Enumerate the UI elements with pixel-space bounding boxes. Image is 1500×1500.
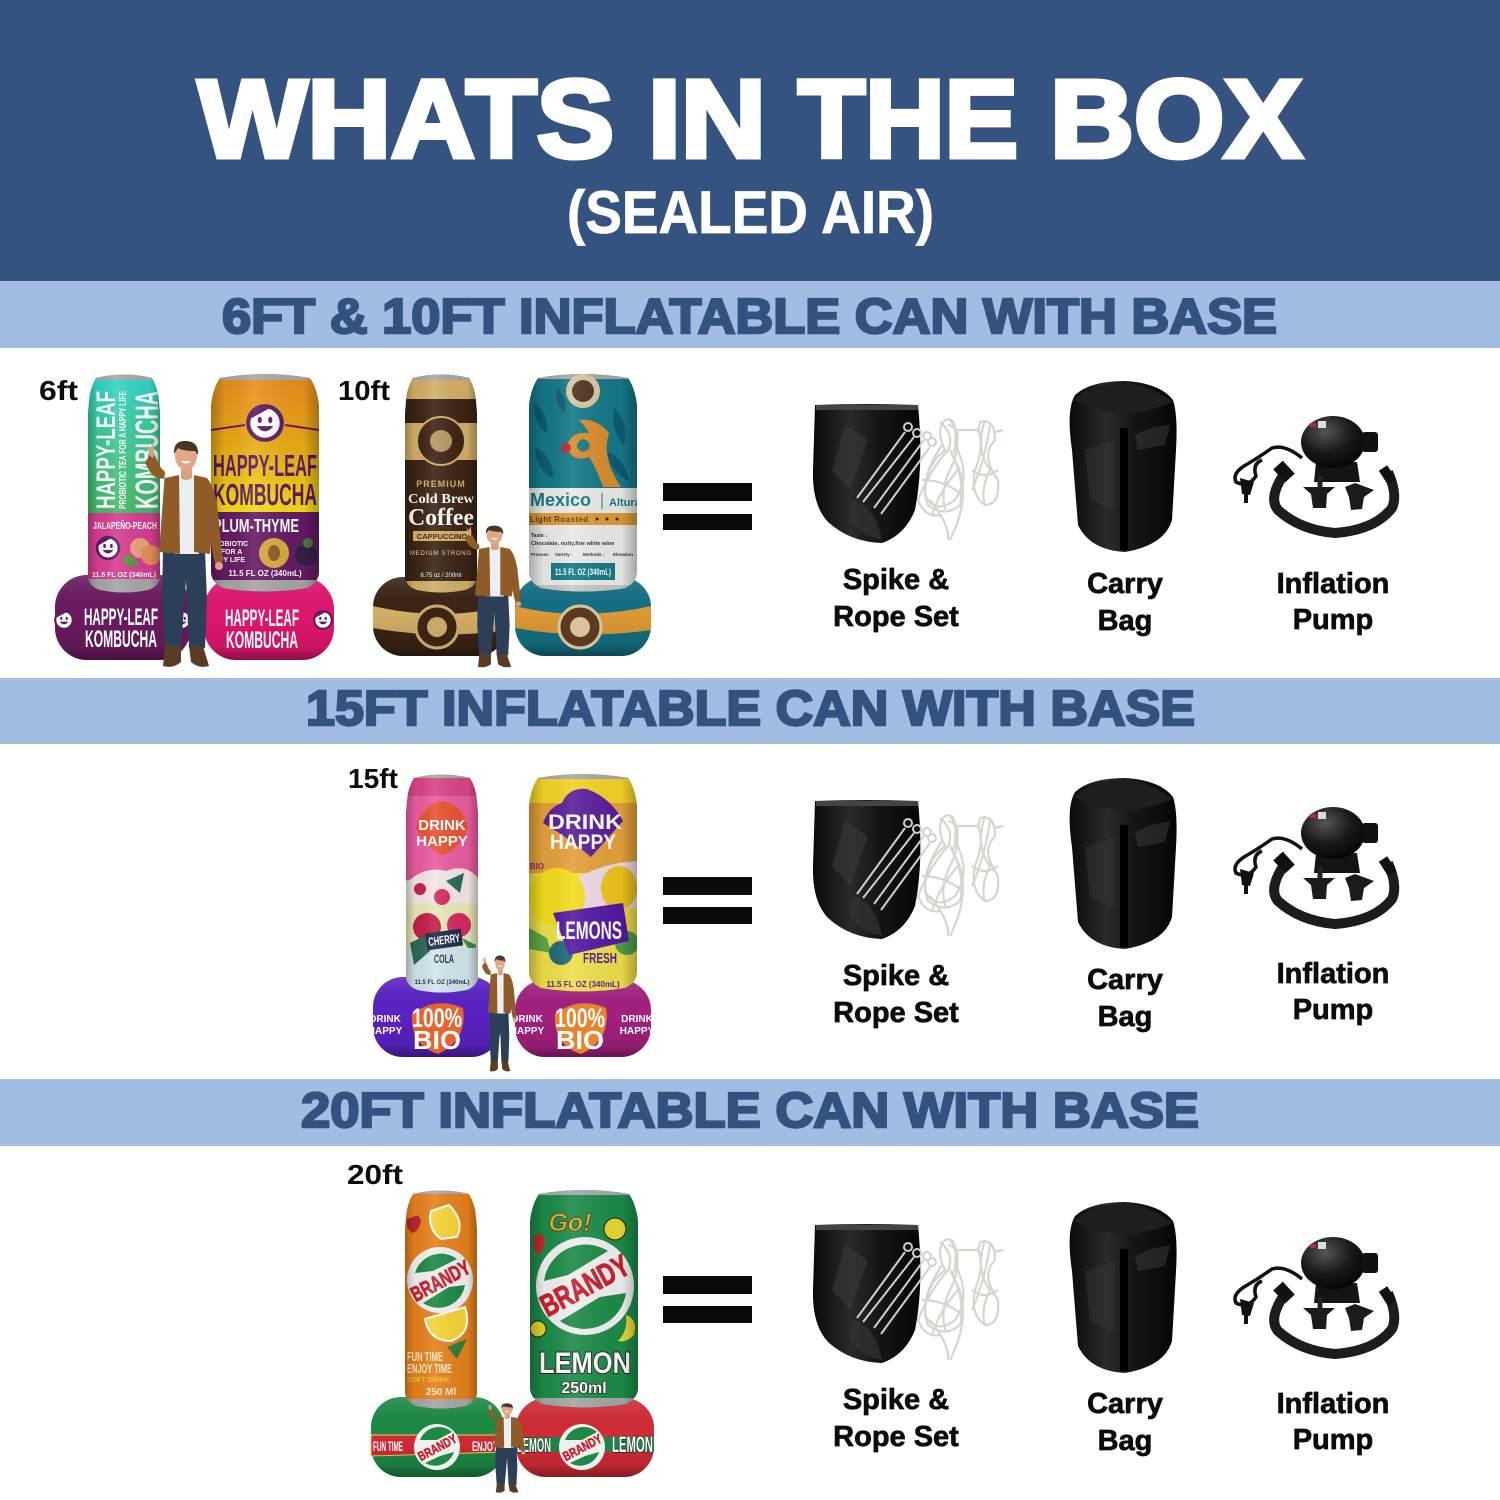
section band: 20ft — [0, 1079, 1500, 1146]
base: magenta drink happy: HAPPY — [510, 1026, 545, 1037]
base: green brandy: FUN TIME — [373, 1438, 403, 1454]
can: orange brandy: FUN TIME — [407, 1349, 443, 1364]
label: carry bag: Carry — [1087, 568, 1163, 600]
base: magenta drink happy — [510, 980, 655, 1057]
label: carry bag: Bag — [1098, 1425, 1152, 1457]
can: mexico altura coffee: Mexico — [530, 490, 591, 510]
can: plum thyme kombucha: 11.5 FL OZ (340mL) — [228, 569, 302, 578]
icon: carry bag — [1070, 778, 1177, 949]
can: lemons fresh: LEMONS — [556, 917, 622, 945]
base: magenta drink happy: DRINK — [511, 1014, 544, 1025]
can: mexico altura coffee: Chocolate, nutty,fine white wine — [531, 541, 614, 547]
can: mexico altura coffee: Light Roasted — [530, 515, 589, 524]
can: orange brandy: ENJOY TIME — [407, 1361, 452, 1376]
label: inflation pump: Inflation — [1277, 568, 1389, 600]
title: IN — [648, 58, 766, 181]
can: lemons fresh — [528, 770, 639, 996]
band heading: 15ft: 15FT INFLATABLE CAN WITH BASE — [306, 682, 1195, 736]
can: mexico altura coffee: Variety : — [555, 552, 573, 557]
can: cherry cola: DRINK — [418, 817, 466, 834]
can: cherry cola: 11.5 FL OZ (340mL) — [415, 980, 469, 986]
can: green lemon brandy: 250ml — [561, 1380, 607, 1397]
icon: inflation pump — [1235, 1237, 1394, 1354]
can: cherry cola: HAPPY — [416, 833, 468, 850]
size label 10ft: 10ft — [338, 375, 390, 406]
can: cold brew coffee: MEDIUM STRONG — [410, 551, 472, 557]
base: purple kombucha: KOMBUCHA — [85, 626, 157, 653]
can: green lemon brandy: Go! — [548, 1209, 592, 1237]
title — [198, 58, 1302, 181]
title: BOX — [1050, 58, 1302, 181]
label: spike and rope set: Rope Set — [833, 1421, 959, 1453]
panel: included items first row — [813, 381, 1394, 637]
can: cherry cola: COLA — [434, 952, 454, 966]
base: magenta drink happy: BIO — [556, 1025, 604, 1055]
can: cold brew coffee: PREMIUM — [416, 479, 466, 489]
can: mexico altura coffee: Elevation — [613, 552, 633, 557]
person: 15ft scale — [482, 955, 516, 1071]
base: red brandy: BRANDY — [560, 1431, 605, 1464]
can: jalapeno peach kombucha: PROBIOTIC TEA FOR A HAPPY LIFE — [118, 391, 129, 509]
panel: 20ft cans — [347, 1159, 654, 1493]
label: inflation pump: Pump — [1293, 1424, 1373, 1456]
icon: spike and rope set — [813, 800, 1003, 939]
can: lemons fresh: BIO — [530, 862, 544, 871]
person: 10ft scale — [465, 526, 521, 667]
base: purple drink happy: DRINK — [369, 1014, 402, 1025]
base: pink kombucha: HAPPY-LEAF — [225, 605, 299, 632]
band heading: 6ft and 10ft: 6FT & 10FT INFLATABLE CAN WITH BASE — [222, 290, 1277, 344]
person: 20ft scale — [487, 1403, 525, 1493]
header background — [0, 0, 1500, 281]
can: cold brew coffee: CAPPUCCINO — [417, 532, 467, 541]
size label 6ft: 6ft — [39, 375, 78, 406]
base: purple drink happy: 100% — [412, 1003, 462, 1033]
title: WHATS — [198, 58, 614, 181]
icon: carry bag — [1070, 381, 1177, 552]
can: jalapeno peach kombucha: HAPPY-LEAF — [91, 391, 121, 509]
can: mexico altura coffee — [528, 370, 642, 596]
base: magenta drink happy: HAPPY — [620, 1026, 655, 1037]
can: lemons fresh: 11.5 FL OZ (340mL) — [546, 980, 620, 989]
can: mexico altura coffee: Methods : — [583, 552, 605, 557]
label: inflation pump: Inflation — [1277, 1388, 1389, 1420]
can: green lemon brandy — [529, 1186, 639, 1413]
can: orange brandy: BRANDY — [407, 1256, 474, 1307]
label: spike and rope set: Spike & — [843, 1384, 949, 1416]
person: 6ft scale — [145, 441, 223, 667]
label: inflation pump: Inflation — [1277, 958, 1389, 990]
can: plum thyme kombucha: KOMBUCHA — [213, 477, 317, 512]
label: spike and rope set: Spike & — [843, 960, 949, 992]
can: plum thyme kombucha: PLUM-THYME — [213, 516, 299, 536]
can: plum thyme kombucha: HAPPY-LEAF — [213, 448, 317, 483]
base: purple kombucha: HAPPY-LEAF — [84, 604, 158, 631]
can: plum thyme kombucha: PPY LIFE — [214, 557, 245, 564]
can: jalapeno peach kombucha — [88, 374, 160, 592]
base: magenta drink happy: DRINK — [621, 1014, 654, 1025]
label: spike and rope set: Rope Set — [833, 601, 959, 633]
subtitle: (SEALED AIR) — [567, 179, 934, 246]
base: pink kombucha — [204, 577, 334, 660]
base: red brandy: LEMON — [612, 1432, 653, 1457]
base: green brandy: BRANDY — [415, 1431, 460, 1464]
panel: 15ft cans — [348, 763, 655, 1071]
can: plum thyme kombucha — [210, 370, 320, 596]
label: inflation pump: Pump — [1293, 604, 1373, 636]
can: orange brandy — [404, 1186, 478, 1413]
base: red brandy — [516, 1398, 654, 1477]
label: carry bag: Carry — [1087, 1388, 1163, 1420]
icon: inflation pump — [1235, 807, 1394, 924]
base: purple drink happy — [368, 977, 501, 1057]
section band: 6ft and 10ft — [0, 281, 1500, 348]
can: cold brew coffee: Coffee — [408, 505, 474, 531]
can: cold brew coffee — [404, 370, 478, 596]
label: spike and rope set: Rope Set — [833, 997, 959, 1029]
can: plum thyme kombucha: A FOR A — [214, 549, 242, 556]
title: THE — [798, 58, 1018, 181]
section band: 15ft — [0, 678, 1500, 744]
base: red brandy: LEMON — [517, 1435, 551, 1457]
can: mexico altura coffee: 11.5 FL OZ (340mL) — [555, 567, 611, 577]
size label 15ft: 15ft — [348, 763, 398, 794]
label: carry bag: Bag — [1098, 1001, 1152, 1033]
can: green lemon brandy: LEMON — [539, 1347, 631, 1380]
base: purple drink happy: BIO — [413, 1025, 461, 1055]
can: jalapeno peach kombucha: KOMBUCHA — [129, 391, 165, 509]
can: lemons fresh: HAPPY — [550, 831, 616, 854]
base: purple kombucha — [54, 575, 192, 660]
can: cherry cola — [405, 770, 479, 998]
can: cherry cola: CHERRY — [427, 931, 461, 949]
panel: included items second row — [813, 778, 1394, 1033]
equals sign: second row — [663, 877, 752, 924]
base: magenta drink happy: 100% — [555, 1003, 605, 1033]
icon: spike and rope set — [813, 1224, 1003, 1363]
base: teal coffee — [515, 577, 651, 656]
base: green brandy: ENJOY — [472, 1438, 498, 1454]
can: mexico altura coffee: Altura — [609, 497, 642, 509]
label: carry bag: Bag — [1098, 605, 1152, 637]
can: lemons fresh: DRINK — [548, 811, 622, 834]
equals sign: third row — [663, 1276, 752, 1323]
band heading: 20ft: 20FT INFLATABLE CAN WITH BASE — [301, 1084, 1199, 1138]
label: inflation pump: Pump — [1293, 994, 1373, 1026]
base: purple drink happy: HAPPY — [368, 1026, 403, 1037]
can: green lemon brandy: BRANDY — [534, 1247, 636, 1324]
can: cold brew coffee: 6.75 oz / 200ml — [420, 573, 462, 579]
icon: spike and rope set — [813, 404, 1003, 543]
base: green brandy — [371, 1397, 504, 1477]
can: jalapeno peach kombucha: 11.5 FL OZ (340mL) — [92, 572, 156, 579]
equals sign: first row — [663, 483, 752, 530]
can: jalapeno peach kombucha: JALAPEÑO-PEACH — [93, 519, 157, 532]
icon: carry bag — [1070, 1202, 1177, 1373]
can: plum thyme kombucha: ROBIOTIC — [214, 541, 248, 548]
panel: included items third row — [813, 1202, 1394, 1457]
can: lemons fresh: FRESH — [583, 950, 617, 967]
size label 20ft: 20ft — [347, 1159, 403, 1190]
can: orange brandy: 250 Ml — [426, 1387, 457, 1398]
base: brown cold brew — [373, 577, 507, 656]
can: mexico altura coffee: Process — [531, 552, 549, 557]
panel: 6ft and 10ft cans — [39, 370, 651, 667]
label: carry bag: Carry — [1087, 964, 1163, 996]
base: pink kombucha: KOMBUCHA — [226, 627, 298, 654]
icon: inflation pump — [1235, 416, 1394, 533]
can: mexico altura coffee: Taste : — [531, 533, 547, 539]
label: spike and rope set: Spike & — [843, 564, 949, 596]
can: orange brandy: SOFT DRINK — [407, 1377, 450, 1384]
can: cold brew coffee: Cold Brew — [408, 492, 475, 507]
